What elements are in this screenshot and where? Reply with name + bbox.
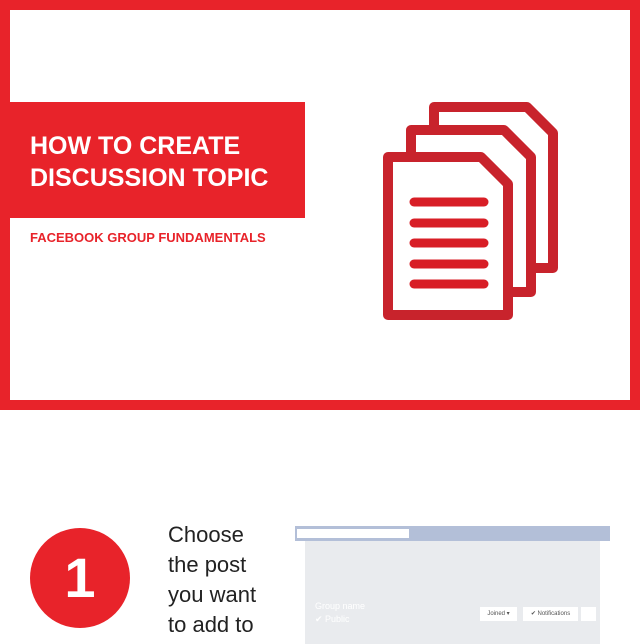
title banner: [10, 102, 305, 218]
screenshot: facebook group: Group name: [315, 601, 365, 611]
step 1 text: to add to: [168, 612, 254, 637]
screenshot: facebook group: Joined ▾: [487, 611, 510, 617]
screenshot: facebook group: ✔ Public: [315, 614, 350, 624]
step 1 text: you want: [168, 582, 256, 607]
title: [30, 132, 268, 192]
step 1 text: Choose: [168, 522, 244, 547]
screenshot: facebook group: ✔ Notifications: [531, 611, 570, 617]
icon: documents: [383, 102, 558, 320]
step 1 number circle: [30, 528, 130, 628]
screenshot: facebook group: [295, 526, 610, 644]
title: DISCUSSION TOPIC: [30, 164, 268, 192]
step 1 text: [168, 522, 256, 637]
step 1 number circle: 1: [64, 546, 96, 609]
title: HOW TO CREATE: [30, 132, 240, 160]
step 1 text: the post: [168, 552, 246, 577]
subtitle: FACEBOOK GROUP FUNDAMENTALS: [30, 230, 266, 245]
header frame: [0, 0, 640, 410]
